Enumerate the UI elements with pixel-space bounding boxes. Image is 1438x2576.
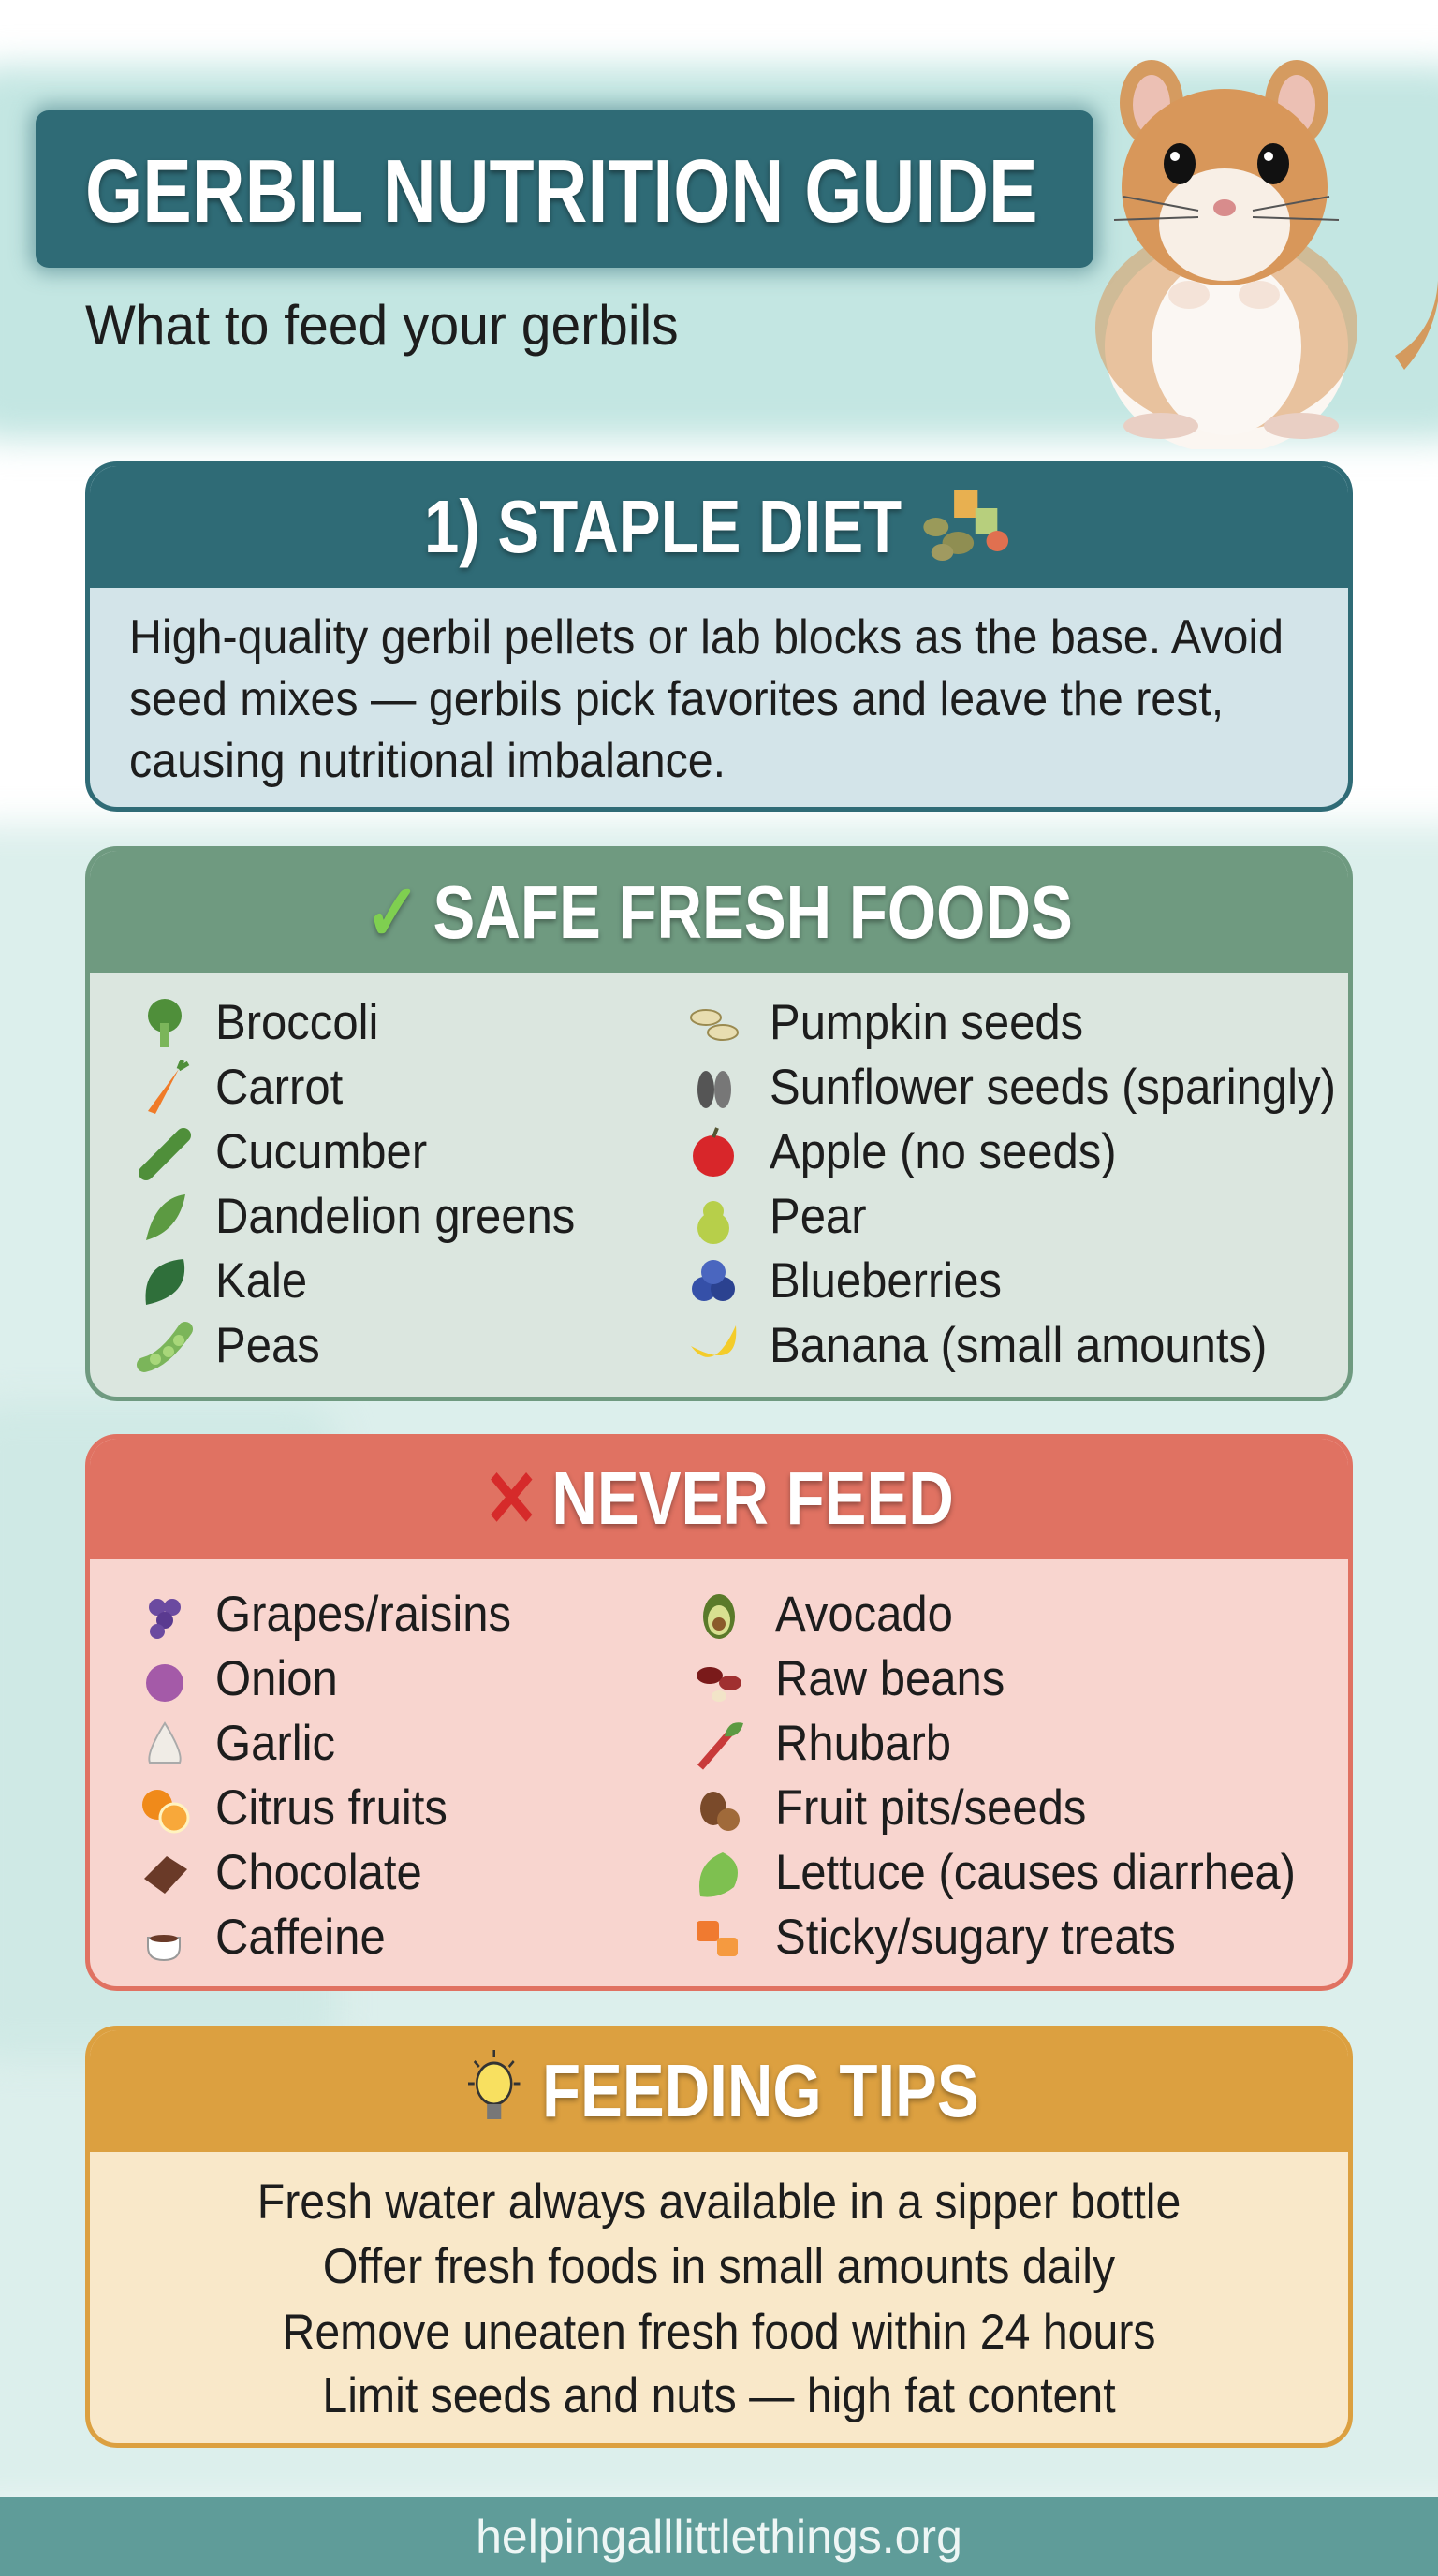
heading: feeding tips: [90, 2030, 1348, 2152]
heading: feeding tips: FEEDING TIPS: [542, 2049, 979, 2132]
heading: never feed: NEVER FEED: [552, 1456, 954, 1540]
text: staple diet: High-quality gerbil pellets or lab blocks as the base. Avoid: [129, 610, 1284, 665]
list: never feed: Citrus fruits: [215, 1780, 448, 1836]
panel: safe fresh foods: [85, 846, 1353, 1401]
list: never feed: Lettuce (causes diarrhea): [775, 1845, 1296, 1900]
list: safe foods: Banana (small amounts): [770, 1318, 1267, 1373]
heading: never feed: [90, 1439, 1348, 1559]
list: safe foods: Peas: [215, 1318, 320, 1373]
background washes: [0, 66, 1438, 440]
list: never feed: Avocado: [775, 1587, 953, 1642]
list: safe foods: Sunflower seeds (sparingly): [770, 1060, 1336, 1115]
list: never feed: [142, 1587, 1296, 1965]
text: staple diet: [129, 610, 1284, 788]
list: never feed: Grapes/raisins: [215, 1587, 511, 1642]
list: safe foods: [137, 995, 1336, 1373]
list: safe foods: Blueberries: [770, 1253, 1002, 1309]
text: staple diet: causing nutritional imbalance.: [129, 734, 726, 788]
list: never feed: Garlic: [215, 1716, 335, 1771]
panel: staple diet: [85, 461, 1353, 812]
illustration: gerbil: [1095, 60, 1438, 449]
list: safe foods: Dandelion greens: [215, 1189, 575, 1244]
heading: safe fresh foods: ✓: [365, 869, 420, 957]
text: tips: Remove uneaten fresh food within 24 hours: [282, 2305, 1156, 2360]
list: safe foods: Broccoli: [215, 995, 378, 1050]
title: GERBIL NUTRITION GUIDE: [85, 141, 1038, 242]
list: safe foods: Pumpkin seeds: [770, 995, 1083, 1050]
list: never feed: Raw beans: [775, 1651, 1005, 1706]
list: safe foods: Apple (no seeds): [770, 1124, 1117, 1179]
list: safe foods: Carrot: [215, 1060, 343, 1115]
list: safe foods: Kale: [215, 1253, 307, 1309]
text: tips: Fresh water always available in a sipper bottle: [257, 2174, 1181, 2230]
text: tips: Offer fresh foods in small amounts daily: [323, 2239, 1115, 2294]
text: tips: Limit seeds and nuts — high fat content: [322, 2368, 1116, 2423]
heading: staple diet: [90, 466, 1348, 588]
subtitle: What to feed your gerbils: [85, 294, 679, 357]
panel: never feed: [85, 1434, 1353, 1991]
list: never feed: Caffeine: [215, 1910, 386, 1965]
list: never feed: Rhubarb: [775, 1716, 951, 1771]
heading: staple diet: 1) STAPLE DIET: [424, 485, 902, 568]
heading: safe fresh foods: [90, 851, 1348, 973]
panel: feeding tips: [85, 2026, 1353, 2448]
text: tips: [257, 2174, 1181, 2423]
list: never feed: Onion: [215, 1651, 338, 1706]
footer: helpingalllittlethings.org: [476, 2510, 962, 2563]
heading: safe fresh foods: SAFE FRESH FOODS: [433, 871, 1073, 953]
footer: [0, 2497, 1438, 2576]
heading: never feed: ✕: [484, 1455, 539, 1543]
icon: light bulb: [468, 2050, 521, 2119]
list: never feed: Chocolate: [215, 1845, 422, 1900]
icon: pellets: [923, 490, 1009, 561]
title banner: [36, 110, 1093, 268]
list: never feed: Sticky/sugary treats: [775, 1910, 1176, 1965]
list: safe foods: Pear: [770, 1189, 867, 1244]
list: never feed: Fruit pits/seeds: [775, 1780, 1086, 1836]
text: staple diet: seed mixes — gerbils pick favorites and leave the rest,: [129, 672, 1224, 726]
list: safe foods: Cucumber: [215, 1124, 427, 1179]
